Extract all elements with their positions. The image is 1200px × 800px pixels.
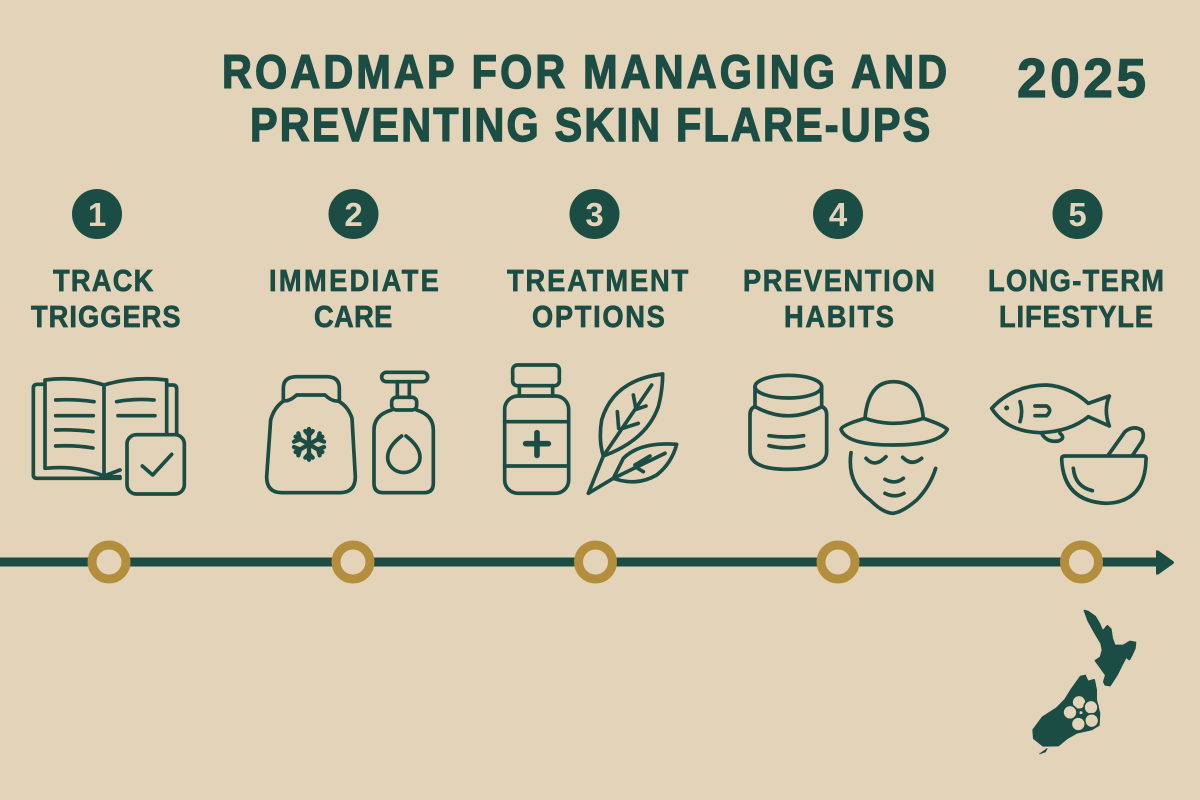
step 1 heading — [31, 189, 181, 334]
step 5 heading — [988, 189, 1164, 334]
step 4 heading — [743, 189, 935, 334]
step 3 heading — [507, 189, 688, 334]
icon: cream jar — [750, 375, 827, 469]
step 4 heading: 4 — [829, 196, 848, 233]
icon: mortar and pestle — [1062, 428, 1146, 503]
step 3 heading: 3 — [585, 196, 604, 233]
icon: pump bottle — [374, 372, 433, 493]
step 3 heading: TREATMENT — [507, 264, 688, 298]
step 4 heading: HABITS — [784, 300, 894, 334]
arrow head — [1156, 550, 1174, 575]
step 4 heading: PREVENTION — [743, 264, 935, 298]
step 3 heading: OPTIONS — [532, 300, 665, 334]
step 2 heading: IMMEDIATE — [269, 264, 439, 298]
step 5 heading: LIFESTYLE — [999, 300, 1153, 334]
icon: journal with checkbox — [33, 379, 184, 494]
icon: leaves — [588, 374, 677, 493]
icon: ice pack — [267, 377, 355, 493]
map: New Zealand with flower — [1033, 611, 1135, 754]
title: ROADMAP FOR MANAGING AND — [222, 47, 947, 99]
step 1 heading: 1 — [88, 196, 106, 233]
icon: fish — [992, 385, 1109, 441]
step 5 heading: LONG-TERM — [988, 264, 1164, 298]
step 2 heading — [269, 189, 439, 334]
step 2 heading: 2 — [344, 196, 363, 233]
icon: face with sun hat — [841, 382, 947, 513]
title: PREVENTING SKIN FLARE-UPS — [250, 100, 930, 152]
step 2 heading: CARE — [314, 300, 392, 334]
flower — [1063, 695, 1099, 731]
step 1 heading: TRACK — [53, 264, 153, 298]
step 1 heading: TRIGGERS — [31, 300, 181, 334]
timeline — [0, 550, 1174, 575]
timeline markers — [92, 545, 1098, 579]
year: 2025 — [1017, 48, 1146, 109]
step 5 heading: 5 — [1068, 196, 1087, 233]
icon: medicine bottle — [505, 365, 569, 493]
title — [222, 47, 947, 152]
